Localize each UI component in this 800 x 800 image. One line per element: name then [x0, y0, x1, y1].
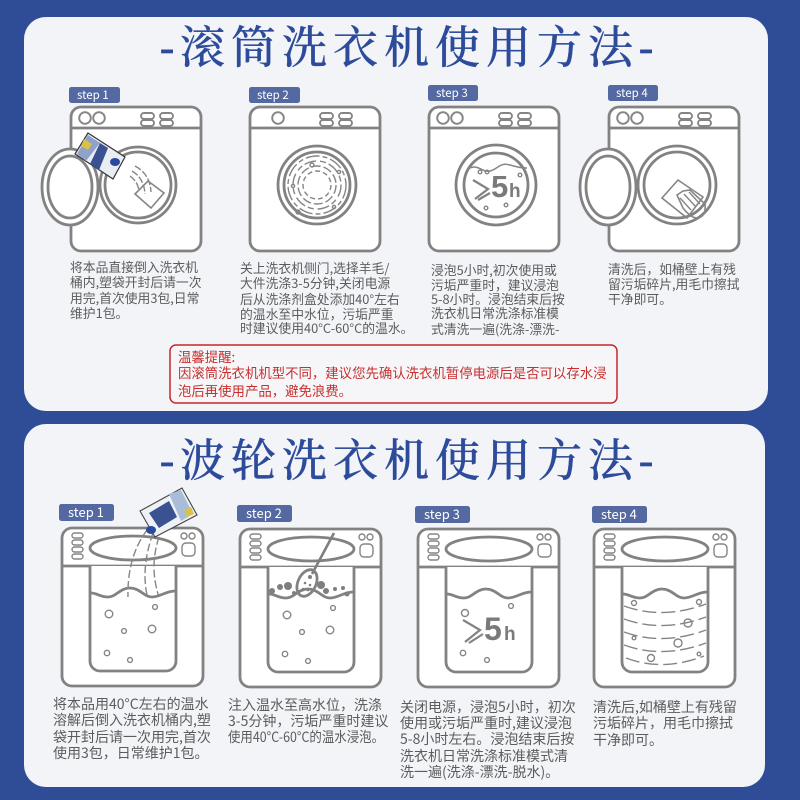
text: step 3: 使用或污垢严重时,建议浸泡: [400, 713, 572, 733]
step 2 pulsator: [228, 503, 388, 747]
icon: top loader soaking over 5 hours: [418, 529, 559, 687]
step 1 drum: [42, 87, 202, 322]
text: step 4: 污垢碎片，用毛巾擦拭: [593, 713, 733, 733]
step 3 pulsator: [400, 504, 576, 782]
panel: drum washer: [24, 11, 768, 411]
step 1 pulsator: [53, 488, 211, 763]
title: drum washer: -: [638, 12, 654, 77]
text: step 2: [240, 258, 413, 337]
text: step 2: 注入温水至高水位，洗涤: [228, 695, 382, 715]
text: step 4: 清洗后，如桶壁上有残: [608, 259, 736, 278]
text: step 4: [608, 259, 740, 308]
title: pulsator washer: 波轮洗衣机使用方法: [180, 424, 639, 489]
badge: step 2: [237, 503, 292, 522]
text: step 1: 将本品用40°C左右的温水: [53, 694, 209, 714]
icon: washer soaking over 5 hours: 5: [491, 169, 508, 204]
step 4 drum: [580, 85, 740, 308]
text: step 1: 桶内,塑袋开封后请一次: [70, 272, 202, 291]
title: drum washer: 滚筒洗衣机使用方法: [180, 11, 639, 76]
text: step 4: 干净即可。: [608, 289, 672, 308]
title: pulsator washer: -: [638, 425, 654, 490]
icon: washer wiped with towel: [580, 107, 739, 251]
badge: step 4: step 4: [601, 504, 637, 523]
text: step 4: 清洗后,如桶壁上有残留: [593, 697, 737, 717]
text: step 3: 关闭电源，浸泡5小时，初次: [400, 697, 576, 717]
icon: top loader with packet pouring: [62, 488, 203, 686]
text: step 4: [593, 697, 737, 750]
text: step 2: 的温水至中水位，污垢严重: [240, 304, 394, 323]
text: step 2: 大件洗涤3-5分钟,关闭电源: [240, 273, 390, 292]
title: drum washer: -: [159, 12, 175, 77]
icon: washer with swirling water: [250, 107, 380, 251]
step 2 drum: [240, 87, 413, 337]
text: step 4: 留污垢碎片,用毛巾擦拭: [608, 274, 740, 293]
badge: step 3: step 3: [436, 85, 468, 101]
callout: warm reminder: 因滚筒洗衣机机型不同，建议您先确认洗衣机暂停电源后是否可以存水浸: [178, 362, 606, 382]
icon: top loader with residue: [594, 529, 735, 687]
text: step 2: 使用40°C-60°C的温水浸泡。: [228, 727, 384, 747]
badge: step 4: [592, 504, 647, 523]
icon: washer soaking over 5 hours: [429, 107, 559, 251]
badge: step 1: step 1: [68, 502, 104, 521]
text: step 1: 将本品直接倒入洗衣机: [70, 257, 198, 276]
icon: top loader soaking over 5 hours: h: [504, 624, 516, 645]
text: step 1: 溶解后倒入洗衣机桶内,塑: [53, 710, 211, 730]
panel: pulsator washer: [24, 424, 765, 787]
text: step 2: 后从洗涤剂盒处添加40°左右: [240, 289, 400, 308]
badge: step 2: step 2: [246, 503, 282, 522]
callout: warm reminder: 温馨提醒:: [178, 346, 235, 366]
text: step 3: 5-8小时左右。浸泡结束后按: [400, 729, 574, 749]
text: step 3: 式清洗一遍(洗涤-漂洗-: [431, 319, 559, 338]
text: step 3: 洗衣机日常洗涤标准模: [431, 303, 559, 322]
text: step 1: 维护1包。: [70, 303, 128, 322]
badge: step 4: [608, 85, 658, 101]
text: step 2: 3-5分钟，污垢严重时建议: [228, 711, 388, 731]
icon: top loader with spoon stirring: [240, 529, 381, 687]
callout: warm reminder: [170, 345, 617, 403]
badge: step 4: step 4: [616, 85, 648, 101]
text: step 3: 5-8小时。浸泡结束后按: [431, 289, 565, 308]
title: pulsator washer: -: [159, 425, 175, 490]
badge: step 1: [59, 502, 114, 521]
text: step 3: [431, 260, 565, 338]
badge: step 2: step 2: [257, 87, 289, 103]
icon: washer with open door and packet: [42, 107, 201, 251]
icon: top loader soaking over 5 hours: 5: [484, 611, 502, 647]
text: step 4: 干净即可。: [593, 730, 663, 750]
text: step 1: 使用3包，日常维护1包。: [53, 743, 209, 763]
text: step 1: 用完,首次使用3包,日常: [70, 288, 199, 307]
text: step 3: 污垢严重时，建议浸泡: [431, 275, 559, 294]
badge: step 3: step 3: [424, 504, 460, 523]
badge: step 3: [428, 85, 478, 101]
badge: step 2: [249, 87, 300, 103]
icon: washer soaking over 5 hours: h: [509, 181, 521, 202]
step 4 pulsator: [592, 504, 737, 750]
text: step 3: 浸泡5小时,初次使用或: [431, 260, 557, 279]
callout: warm reminder: 泡后再使用产品，避免浪费。: [178, 380, 352, 400]
badge: step 1: step 1: [77, 87, 109, 103]
text: step 1: [53, 694, 211, 763]
text: step 3: [400, 697, 576, 782]
text: step 1: 袋开封后请一次用完,首次: [53, 727, 211, 747]
text: step 3: 洗衣机日常洗涤标准模式清: [400, 746, 568, 766]
text: step 1: [70, 257, 202, 322]
badge: step 3: [415, 504, 470, 523]
step 3 drum: [428, 85, 565, 338]
text: step 2: [228, 695, 388, 747]
badge: step 1: [69, 87, 120, 103]
text: step 2: 时建议使用40°C-60°C的温水。: [240, 318, 413, 337]
text: step 2: 关上洗衣机侧门,选择羊毛/: [240, 258, 389, 277]
text: step 3: 洗一遍(洗涤-漂洗-脱水)。: [400, 762, 559, 782]
